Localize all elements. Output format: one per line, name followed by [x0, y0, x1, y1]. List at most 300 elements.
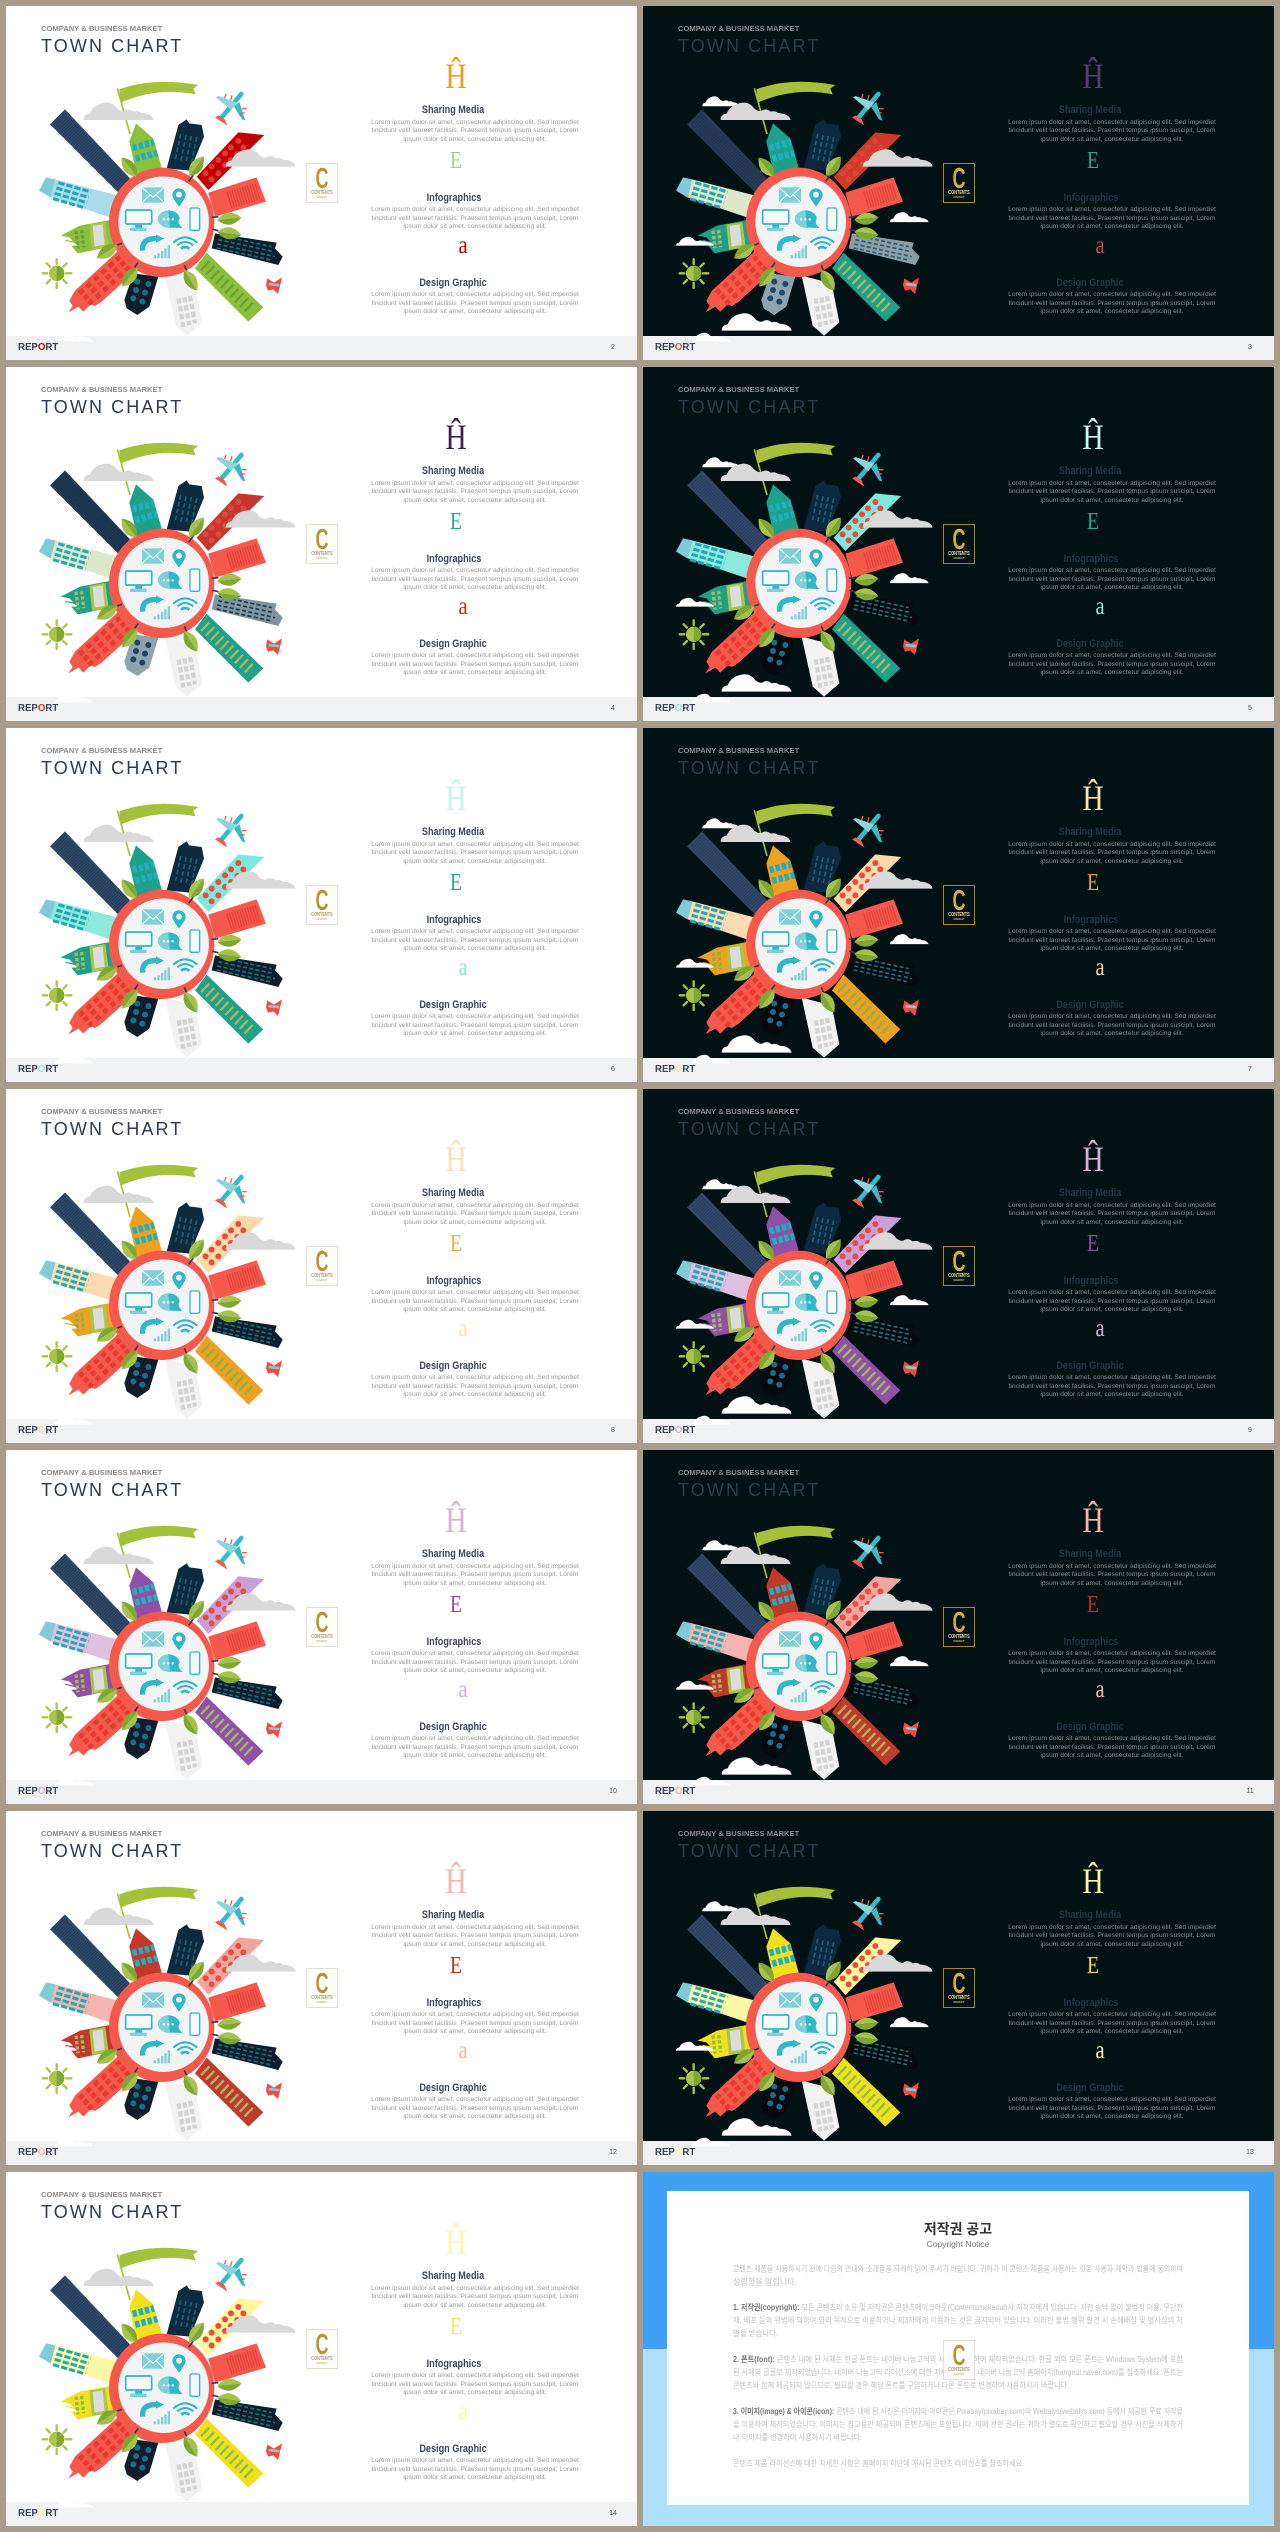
text block [992, 1735, 1232, 1761]
logo badge: C [952, 524, 965, 556]
text block: Lorem ipsum dolor sit amet, consectetur adipiscing elit. Sed imperdiet [371, 1289, 579, 1296]
text block [355, 1924, 595, 1949]
letter E: E [450, 1592, 462, 1618]
text block: tincidunt velit laoreet facilisis. Praesent tempus ipsum suscipit, Lorem [1008, 1298, 1216, 1305]
text block: ipsum dolor sit amet, consectetur adipiscing elit. [403, 584, 547, 591]
logo badge: CONTENTS [948, 1273, 970, 1279]
text block: ipsum dolor sit amet, consectetur adipiscing elit. [403, 1391, 547, 1398]
text block: Lorem ipsum dolor sit amet, consectetur adipiscing elit. Sed imperdiet [1008, 1013, 1216, 1020]
heading: Sharing Media [422, 1909, 484, 1921]
logo badge: CONTENTS [948, 190, 970, 196]
footer bar [6, 2502, 637, 2526]
text block: tincidunt velit laoreet facilisis. Praesent tempus ipsum suscipit, Lorem [371, 488, 579, 495]
text block [992, 1562, 1232, 1588]
text block [1008, 291, 1216, 315]
logo badge: MARKET [953, 1279, 965, 1282]
logo badge [943, 163, 975, 203]
title: TOWN CHART [41, 758, 183, 778]
text block: Lorem ipsum dolor sit amet, consectetur adipiscing elit. Sed imperdiet [371, 291, 579, 298]
logo badge: C [315, 2329, 328, 2361]
logo badge: MARKET [316, 1279, 328, 1282]
text block: ipsum dolor sit amet, consectetur adipiscing elit. [1040, 497, 1184, 504]
logo badge: CONTENTS [311, 551, 333, 557]
heading: Infographics [1064, 1275, 1118, 1287]
text block: ipsum dolor sit amet, consectetur adipiscing elit. [403, 1941, 547, 1948]
text block: ipsum dolor sit amet, consectetur adipiscing elit. [403, 2113, 547, 2120]
logo badge [306, 1246, 338, 1286]
text block: ipsum dolor sit amet, consectetur adipiscing elit. [1040, 584, 1184, 591]
logo badge: MARKET [316, 557, 328, 560]
text block [355, 2284, 595, 2310]
letter a: a [1095, 2037, 1105, 2064]
letter H: Ĥ [445, 417, 467, 457]
footer bar [6, 1780, 637, 1804]
letter H: Ĥ [445, 2222, 467, 2262]
logo badge [943, 524, 975, 564]
text block: Lorem ipsum dolor sit amet, consectetur adipiscing elit. Sed imperdiet [371, 840, 579, 848]
letter E: E [1087, 1953, 1099, 1979]
text block [355, 2011, 595, 2037]
footer bar [643, 1058, 1274, 1082]
text block: ipsum dolor sit amet, consectetur adipiscing elit. [403, 1030, 547, 1037]
logo badge: C [315, 1246, 328, 1278]
footer label: REPORT [655, 341, 695, 353]
text block: Lorem ipsum dolor sit amet, consectetur adipiscing elit. Sed imperdiet [1008, 118, 1216, 126]
heading: Sharing Media [1059, 826, 1121, 838]
logo badge: MARKET [953, 918, 965, 921]
town infographic [676, 442, 933, 702]
heading: Sharing Media [422, 1187, 484, 1199]
text block [1008, 1202, 1216, 1226]
town infographic [676, 804, 933, 1064]
notice text: 2. 폰트(font): 콘텐츠 내에 된 서체는 한글 폰트는 네이버 나눔고딕의 서체를 이용하여 제작되었습니다. 한글 외의 모든 폰트는 Windows System에 포함 [733, 2354, 1184, 2364]
panel: slide 3 [643, 6, 1274, 360]
notice text: 저작권 공고 [924, 2221, 992, 2237]
letter a: a [458, 1676, 468, 1703]
page number: 2 [611, 344, 615, 351]
text block [992, 2096, 1232, 2122]
text block [1008, 567, 1216, 591]
heading: Infographics [1064, 553, 1118, 565]
heading: Design Graphic [419, 999, 487, 1011]
white notice card [667, 2191, 1249, 2505]
text block: tincidunt velit laoreet facilisis. Praesent tempus ipsum suscipit, Lorem [371, 2293, 579, 2300]
notice text: 재, 배포 등의 위법에 의하여 영리 목적으로 이용하거나 제3자에게 이용하는 것은 금지되어 있습니다. 이러한 불법 행위 발견 시 손해배상 및 형사상의 처 [733, 2315, 1183, 2325]
title: TOWN CHART [41, 1841, 183, 1861]
heading: Design Graphic [419, 277, 487, 289]
text block: Lorem ipsum dolor sit amet, consectetur adipiscing elit. Sed imperdiet [371, 2284, 579, 2292]
subtitle: COMPANY & BUSINESS MARKET [678, 24, 799, 33]
text block: ipsum dolor sit amet, consectetur adipiscing elit. [403, 1306, 547, 1313]
text block [1008, 1289, 1216, 1313]
text block: Lorem ipsum dolor sit amet, consectetur adipiscing elit. Sed imperdiet [371, 1924, 579, 1930]
text block: Lorem ipsum dolor sit amet, consectetur adipiscing elit. Sed imperdiet [1008, 2096, 1216, 2103]
text block: ipsum dolor sit amet, consectetur adipiscing elit. [403, 2302, 547, 2309]
notice text: 1. 저작권(copyright): 모든 콘텐츠의 소유 및 저작권은 콘텐츠메이크아웃(Contentsmakeout)사 저작자에게 있습니다. 사전 승낙 없이 불법적 이용, 무단전 [733, 2302, 1183, 2312]
subtitle: COMPANY & BUSINESS MARKET [678, 1829, 799, 1838]
text block: tincidunt velit laoreet facilisis. Praesent tempus ipsum suscipit, Lorem [371, 127, 579, 134]
logo badge: CONTENTS [948, 2367, 970, 2373]
heading: Design Graphic [419, 1721, 487, 1733]
logo badge [306, 524, 338, 564]
logo badge [306, 885, 338, 925]
footer bar [6, 1419, 637, 1443]
panel: slide 10 [6, 1450, 637, 1804]
footer bar [643, 2141, 1274, 2165]
heading: Design Graphic [1056, 277, 1124, 289]
subtitle: COMPANY & BUSINESS MARKET [41, 24, 162, 33]
logo badge: CONTENTS [311, 2356, 333, 2362]
text block [371, 1374, 579, 1398]
text block: Lorem ipsum dolor sit amet, consectetur adipiscing elit. Sed imperdiet [371, 928, 579, 935]
footer label: REPORT [655, 2146, 695, 2158]
letter a: a [458, 593, 468, 620]
letter E: E [450, 1953, 462, 1979]
text block: tincidunt velit laoreet facilisis. Praesent tempus ipsum suscipit, Lorem [1008, 1659, 1216, 1666]
text block: tincidunt velit laoreet facilisis. Praesent tempus ipsum suscipit, Lorem [371, 661, 579, 668]
panel: slide 14 [6, 2172, 637, 2526]
text block: ipsum dolor sit amet, consectetur adipiscing elit. [1040, 1306, 1184, 1313]
logo badge: CONTENTS [948, 912, 970, 918]
logo badge: CONTENTS [311, 1634, 333, 1640]
page number: 5 [1248, 705, 1252, 712]
footer label: REPORT [18, 341, 58, 353]
text block: tincidunt velit laoreet facilisis. Praesent tempus ipsum suscipit, Lorem [371, 215, 579, 222]
page number: 3 [1248, 344, 1252, 351]
footer bar [643, 1780, 1274, 1804]
footer label: REPORT [18, 2507, 58, 2519]
text block: Lorem ipsum dolor sit amet, consectetur adipiscing elit. Sed imperdiet [371, 118, 579, 126]
text block [1008, 480, 1216, 504]
logo badge: C [952, 1607, 965, 1639]
letter a: a [458, 2037, 468, 2064]
logo badge: CONTENTS [948, 1634, 970, 1640]
footer label: REPORT [18, 1785, 58, 1797]
heading: Sharing Media [1059, 104, 1121, 116]
logo badge: MARKET [953, 1640, 965, 1643]
logo badge: CONTENTS [311, 1995, 333, 2001]
text block: Lorem ipsum dolor sit amet, consectetur adipiscing elit. Sed imperdiet [371, 567, 579, 574]
heading: Sharing Media [422, 1548, 484, 1560]
footer label: REPORT [18, 702, 58, 714]
letter a: a [1095, 954, 1105, 981]
page number: 7 [1248, 1066, 1252, 1073]
letter E: E [1087, 870, 1099, 896]
town infographic [667, 1504, 947, 1784]
text block: Lorem ipsum dolor sit amet, consectetur adipiscing elit. Sed imperdiet [371, 1374, 579, 1381]
logo badge [943, 885, 975, 925]
text block [371, 1013, 579, 1037]
text block [371, 206, 579, 230]
subtitle: COMPANY & BUSINESS MARKET [41, 2190, 162, 2199]
heading: Infographics [427, 192, 481, 204]
text block: Lorem ipsum dolor sit amet, consectetur adipiscing elit. Sed imperdiet [1008, 1735, 1216, 1742]
text block: tincidunt velit laoreet facilisis. Praesent tempus ipsum suscipit, Lorem [371, 2105, 579, 2112]
town infographic [39, 442, 296, 702]
text block [355, 2457, 595, 2483]
text block: Lorem ipsum dolor sit amet, consectetur adipiscing elit. Sed imperdiet [1008, 480, 1216, 486]
text block: ipsum dolor sit amet, consectetur adipiscing elit. [1040, 945, 1184, 952]
text block: Lorem ipsum dolor sit amet, consectetur adipiscing elit. Sed imperdiet [1008, 1650, 1216, 1657]
letter E: E [450, 148, 462, 174]
heading: Design Graphic [1056, 638, 1124, 650]
text block: ipsum dolor sit amet, consectetur adipiscing elit. [403, 945, 547, 952]
logo badge [943, 1968, 975, 2008]
logo badge [943, 1246, 975, 1286]
text block [355, 1562, 595, 1588]
heading: Sharing Media [1059, 1909, 1121, 1921]
text block [355, 1650, 595, 1676]
page number: 8 [611, 1427, 615, 1434]
town infographic [39, 804, 296, 1064]
text block: Lorem ipsum dolor sit amet, consectetur adipiscing elit. Sed imperdiet [1008, 1289, 1216, 1296]
text block: ipsum dolor sit amet, consectetur adipiscing elit. [403, 858, 547, 865]
page number: 13 [1246, 2149, 1254, 2156]
letter a: a [1095, 1315, 1105, 1342]
page number: 4 [611, 705, 615, 712]
letter a: a [458, 2398, 468, 2425]
subtitle: COMPANY & BUSINESS MARKET [41, 1107, 162, 1116]
text block: Lorem ipsum dolor sit amet, consectetur adipiscing elit. Sed imperdiet [1008, 928, 1216, 935]
title: TOWN CHART [41, 1480, 183, 1500]
text block: ipsum dolor sit amet, consectetur adipiscing elit. [1040, 2113, 1184, 2120]
footer bar [6, 2141, 637, 2165]
text block: Lorem ipsum dolor sit amet, consectetur adipiscing elit. Sed imperdiet [371, 1013, 579, 1020]
page number: 10 [609, 1788, 617, 1795]
logo badge: C [315, 163, 328, 195]
letter H: Ĥ [1082, 1139, 1104, 1179]
town infographic [30, 2226, 310, 2506]
footer label: REPORT [655, 1424, 695, 1436]
logo badge: MARKET [953, 557, 965, 560]
letter a: a [458, 1315, 468, 1342]
title: TOWN CHART [41, 397, 183, 417]
text block: tincidunt velit laoreet facilisis. Praesent tempus ipsum suscipit, Lorem [371, 576, 579, 583]
panel: slide 6 [6, 728, 637, 1082]
heading: Infographics [1064, 1997, 1118, 2009]
text block: tincidunt velit laoreet facilisis. Praesent tempus ipsum suscipit, Lorem [1008, 215, 1216, 222]
footer bar [6, 1058, 637, 1082]
text block: ipsum dolor sit amet, consectetur adipiscing elit. [1040, 1580, 1184, 1587]
heading: Sharing Media [422, 104, 484, 116]
text block [1008, 840, 1216, 865]
title: TOWN CHART [678, 1841, 820, 1861]
logo badge: MARKET [316, 918, 328, 921]
title: TOWN CHART [678, 36, 820, 56]
notice text: 나 이미지를 변경하여 사용하시기 바랍니다. [733, 2432, 862, 2442]
logo badge: MARKET [316, 2001, 328, 2004]
logo badge: MARKET [316, 1640, 328, 1643]
text block: ipsum dolor sit amet, consectetur adipiscing elit. [1040, 1030, 1184, 1037]
logo badge: CONTENTS [948, 1995, 970, 2001]
logo badge: C [952, 1968, 965, 2000]
heading: Infographics [427, 553, 481, 565]
text block: ipsum dolor sit amet, consectetur adipiscing elit. [1040, 223, 1184, 230]
subtitle: COMPANY & BUSINESS MARKET [41, 385, 162, 394]
text block [371, 840, 579, 865]
text block: ipsum dolor sit amet, consectetur adipiscing elit. [1040, 669, 1184, 676]
letter a: a [458, 232, 468, 259]
town infographic [676, 1164, 933, 1424]
heading: Infographics [427, 1275, 481, 1287]
text block: Lorem ipsum dolor sit amet, consectetur adipiscing elit. Sed imperdiet [371, 1735, 579, 1742]
notice text: 된 서체의 글꼴로 제작되었습니다. 네이버 나눔고딕 라이선스에 대한 자세한 사항은 네이버 나눔고딕 홈페이지(hangeul.naver.com)를 참조하세요. 폰트는 [733, 2367, 1183, 2377]
notice text: 을 이용하여 제작되었습니다. 이미지는 참고용만 제공되며 콘텐츠에는 포함됩니다. 이에 관한 권리는 귀하가 별도로 확인하고 필요할 경우 사진을 삭제하거 [733, 2419, 1183, 2429]
heading: Design Graphic [419, 2443, 487, 2455]
logo badge: CONTENTS [311, 190, 333, 196]
text block: ipsum dolor sit amet, consectetur adipiscing elit. [403, 1219, 547, 1226]
text block: Lorem ipsum dolor sit amet, consectetur adipiscing elit. Sed imperdiet [1008, 1374, 1216, 1381]
text block: tincidunt velit laoreet facilisis. Praesent tempus ipsum suscipit, Lorem [1008, 661, 1216, 668]
heading: Infographics [1064, 192, 1118, 204]
text block: tincidunt velit laoreet facilisis. Praesent tempus ipsum suscipit, Lorem [371, 2466, 579, 2473]
text block: Lorem ipsum dolor sit amet, consectetur adipiscing elit. Sed imperdiet [1008, 567, 1216, 574]
heading: Infographics [1064, 914, 1118, 926]
letter E: E [1087, 148, 1099, 174]
text block: Lorem ipsum dolor sit amet, consectetur adipiscing elit. Sed imperdiet [371, 480, 579, 486]
logo badge: C [315, 1607, 328, 1639]
text block: ipsum dolor sit amet, consectetur adipiscing elit. [1040, 1391, 1184, 1398]
page number: 6 [611, 1066, 615, 1073]
text block: Lorem ipsum dolor sit amet, consectetur adipiscing elit. Sed imperdiet [371, 2457, 579, 2464]
text block: Lorem ipsum dolor sit amet, consectetur adipiscing elit. Sed imperdiet [1008, 291, 1216, 298]
logo badge: MARKET [953, 2001, 965, 2004]
logo badge: MARKET [316, 196, 328, 199]
text block [355, 2096, 595, 2122]
letter E: E [450, 870, 462, 896]
text block: tincidunt velit laoreet facilisis. Praesent tempus ipsum suscipit, Lorem [1008, 2105, 1216, 2112]
text block [992, 2011, 1232, 2037]
text block: tincidunt velit laoreet facilisis. Praesent tempus ipsum suscipit, Lorem [371, 1571, 579, 1578]
panel: slide 11 [643, 1450, 1274, 1804]
text block: tincidunt velit laoreet facilisis. Praesent tempus ipsum suscipit, Lorem [371, 1298, 579, 1305]
logo badge: C [315, 885, 328, 917]
heading: Design Graphic [1056, 999, 1124, 1011]
heading: Infographics [427, 1636, 481, 1648]
footer bar [6, 697, 637, 721]
logo badge: CONTENTS [948, 551, 970, 557]
letter H: Ĥ [445, 1139, 467, 1179]
text block: Lorem ipsum dolor sit amet, consectetur adipiscing elit. Sed imperdiet [371, 2096, 579, 2103]
letter H: Ĥ [445, 56, 467, 96]
text block [371, 928, 579, 952]
logo badge: CONTENTS [311, 912, 333, 918]
text block: tincidunt velit laoreet facilisis. Praesent tempus ipsum suscipit, Lorem [1008, 127, 1216, 134]
text block: Lorem ipsum dolor sit amet, consectetur adipiscing elit. Sed imperdiet [1008, 1202, 1216, 1208]
text block: Lorem ipsum dolor sit amet, consectetur adipiscing elit. Sed imperdiet [371, 1562, 579, 1570]
text block: ipsum dolor sit amet, consectetur adipiscing elit. [403, 1667, 547, 1674]
text block: ipsum dolor sit amet, consectetur adipiscing elit. [403, 136, 547, 143]
letter H: Ĥ [445, 1500, 467, 1540]
town infographic [30, 1865, 310, 2145]
footer bar [643, 336, 1274, 360]
logo badge: C [315, 1968, 328, 2000]
title: TOWN CHART [678, 1480, 820, 1500]
letter E: E [1087, 509, 1099, 535]
footer label: REPORT [18, 1063, 58, 1075]
text block: tincidunt velit laoreet facilisis. Praesent tempus ipsum suscipit, Lorem [371, 1932, 579, 1939]
footer label: REPORT [18, 2146, 58, 2158]
text block: ipsum dolor sit amet, consectetur adipiscing elit. [403, 1580, 547, 1587]
footer label: REPORT [655, 1785, 695, 1797]
text block: tincidunt velit laoreet facilisis. Praesent tempus ipsum suscipit, Lorem [371, 1383, 579, 1390]
text block: ipsum dolor sit amet, consectetur adipiscing elit. [1040, 858, 1184, 865]
text block: tincidunt velit laoreet facilisis. Praesent tempus ipsum suscipit, Lorem [1008, 1932, 1216, 1939]
logo badge [306, 1968, 338, 2008]
subtitle: COMPANY & BUSINESS MARKET [41, 1829, 162, 1838]
heading: Infographics [427, 914, 481, 926]
notice text [643, 2172, 1274, 2526]
text block: ipsum dolor sit amet, consectetur adipiscing elit. [1040, 1752, 1184, 1759]
text block: tincidunt velit laoreet facilisis. Praesent tempus ipsum suscipit, Lorem [371, 2381, 579, 2388]
text block: ipsum dolor sit amet, consectetur adipiscing elit. [403, 1752, 547, 1759]
footer bar [6, 336, 637, 360]
logo badge: C [315, 524, 328, 556]
text block: ipsum dolor sit amet, consectetur adipiscing elit. [403, 223, 547, 230]
text block [371, 291, 579, 315]
notice text: 성립함을 알립니다. [733, 2276, 797, 2286]
text block [1008, 1374, 1216, 1398]
text block: tincidunt velit laoreet facilisis. Praesent tempus ipsum suscipit, Lorem [1008, 1744, 1216, 1751]
notice text: 콘텐츠 제품을 사용하시기 전에 다음의 안내와 소개글을 자세히 읽어 주시기 바랍니다. 귀하가 이 콘텐츠 제품을 사용하는 것은 사용자 계약과 법률에 동의하여 [733, 2264, 1183, 2274]
logo badge: C [952, 2340, 965, 2372]
panel: copyright notice [643, 2172, 1274, 2526]
letter H: Ĥ [445, 1861, 467, 1901]
text block: tincidunt velit laoreet facilisis. Praesent tempus ipsum suscipit, Lorem [1008, 937, 1216, 944]
text block: tincidunt velit laoreet facilisis. Praesent tempus ipsum suscipit, Lorem [1008, 488, 1216, 495]
text block [1008, 118, 1216, 143]
text block: Lorem ipsum dolor sit amet, consectetur adipiscing elit. Sed imperdiet [1008, 840, 1216, 848]
text block: tincidunt velit laoreet facilisis. Praesent tempus ipsum suscipit, Lorem [1008, 849, 1216, 856]
heading: Sharing Media [1059, 1187, 1121, 1199]
text block: ipsum dolor sit amet, consectetur adipiscing elit. [1040, 1667, 1184, 1674]
text block [371, 1202, 579, 1226]
text block: tincidunt velit laoreet facilisis. Praesent tempus ipsum suscipit, Lorem [1008, 1383, 1216, 1390]
text block: tincidunt velit laoreet facilisis. Praesent tempus ipsum suscipit, Lorem [371, 300, 579, 307]
letter a: a [458, 954, 468, 981]
letter H: Ĥ [1082, 1500, 1104, 1540]
text block: ipsum dolor sit amet, consectetur adipiscing elit. [1040, 308, 1184, 315]
text block: ipsum dolor sit amet, consectetur adipiscing elit. [1040, 1941, 1184, 1948]
town infographic [39, 1164, 296, 1424]
heading: Design Graphic [419, 1360, 487, 1372]
logo badge: C [952, 163, 965, 195]
text block: ipsum dolor sit amet, consectetur adipiscing elit. [1040, 1219, 1184, 1226]
text block: tincidunt velit laoreet facilisis. Praesent tempus ipsum suscipit, Lorem [1008, 1022, 1216, 1029]
notice text: 콘텐츠 제품 라이선스에 대한 자세한 사항은 홈페이지 하단에 게시된 콘텐츠 라이선스를 참조하세요. [733, 2458, 1024, 2468]
panel: slide 13 [643, 1811, 1274, 2165]
panel: slide 2 [6, 6, 637, 360]
logo badge [943, 2340, 975, 2380]
logo badge [306, 163, 338, 203]
title: TOWN CHART [678, 758, 820, 778]
text block: ipsum dolor sit amet, consectetur adipiscing elit. [1040, 2028, 1184, 2035]
subtitle: COMPANY & BUSINESS MARKET [678, 1468, 799, 1477]
text block: ipsum dolor sit amet, consectetur adipiscing elit. [1040, 136, 1184, 143]
text block: tincidunt velit laoreet facilisis. Praesent tempus ipsum suscipit, Lorem [371, 1744, 579, 1751]
text block: Lorem ipsum dolor sit amet, consectetur adipiscing elit. Sed imperdiet [1008, 1924, 1216, 1930]
text block [1008, 1013, 1216, 1037]
subtitle: COMPANY & BUSINESS MARKET [678, 746, 799, 755]
text block: Lorem ipsum dolor sit amet, consectetur adipiscing elit. Sed imperdiet [371, 1202, 579, 1208]
heading: Sharing Media [422, 826, 484, 838]
text block: Lorem ipsum dolor sit amet, consectetur adipiscing elit. Sed imperdiet [371, 2372, 579, 2379]
heading: Design Graphic [1056, 1360, 1124, 1372]
text block: tincidunt velit laoreet facilisis. Praesent tempus ipsum suscipit, Lorem [371, 2020, 579, 2027]
town infographic [30, 1504, 310, 1784]
logo badge: C [952, 885, 965, 917]
heading: Sharing Media [422, 2270, 484, 2282]
